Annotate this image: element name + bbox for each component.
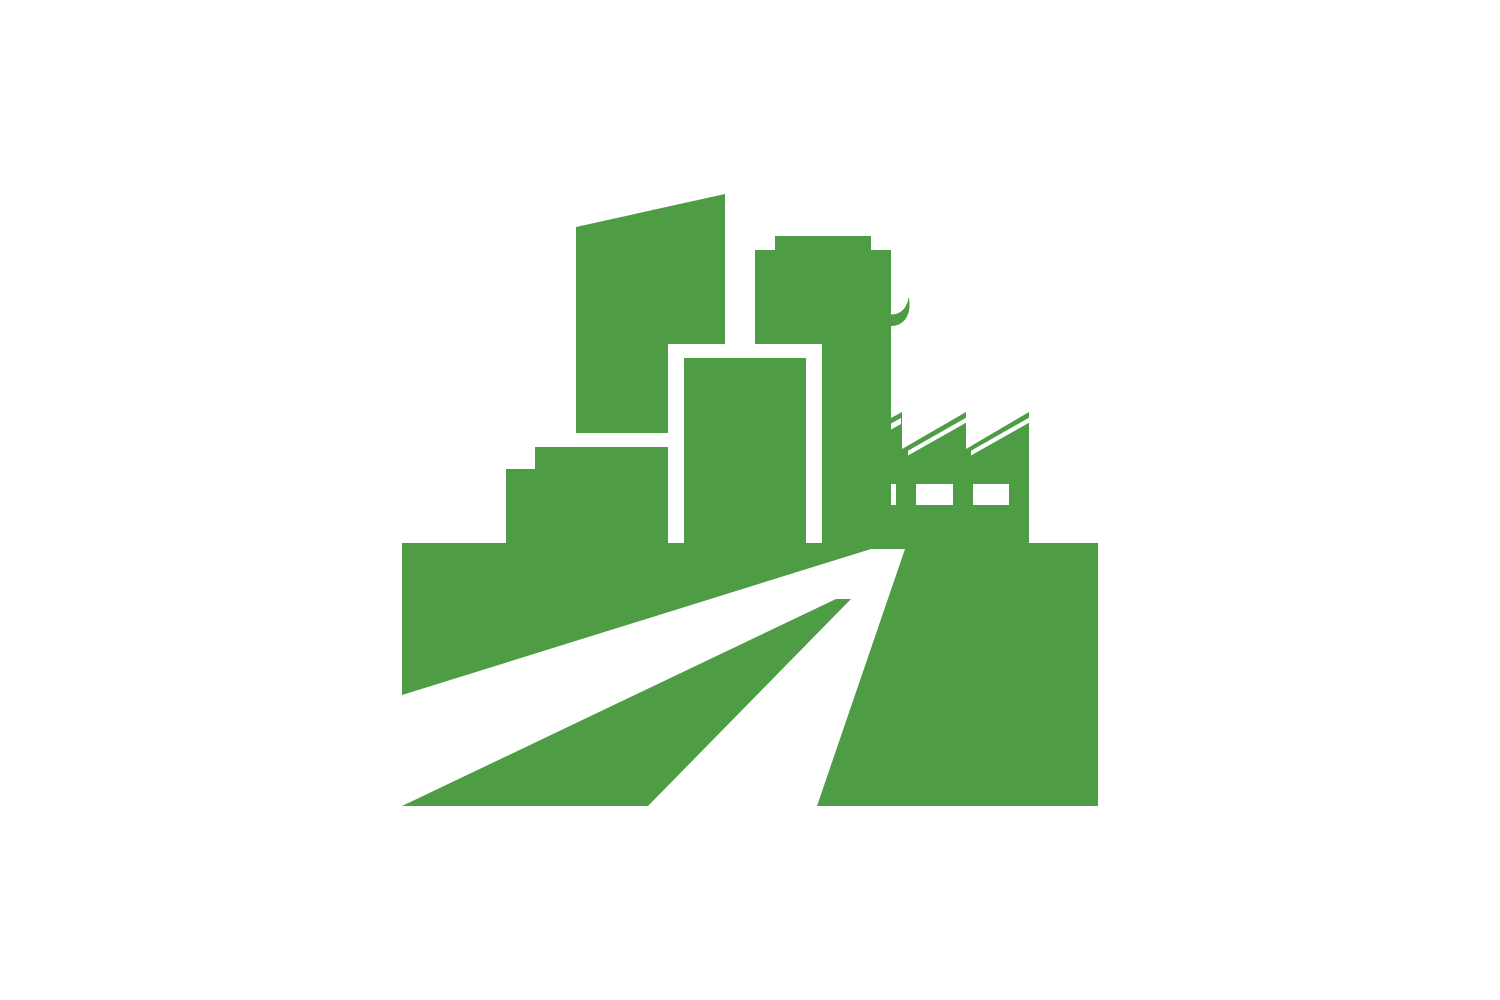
icon: road centre wedge — [402, 599, 851, 806]
icon: crescent moon beside tower — [891, 297, 910, 326]
icon: tall slanted-roof tower — [576, 194, 725, 433]
icon: skyline ground block with buildings and factory — [402, 236, 1098, 806]
